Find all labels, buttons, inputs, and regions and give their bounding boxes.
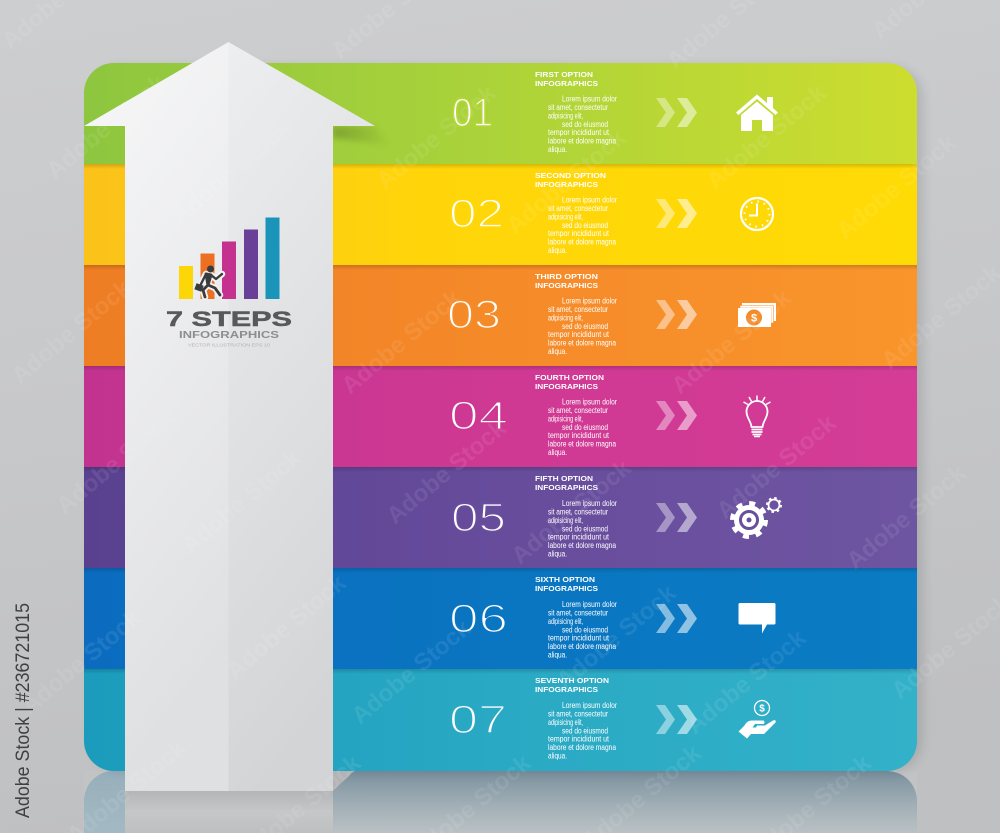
- heading: INFOGRAPHICS: [535, 584, 598, 593]
- watermarks: Adobe Stock: [337, 284, 467, 400]
- icon: running businessman: [195, 266, 222, 297]
- body text: adipisicing elit,: [548, 617, 583, 626]
- band 3: third option: [84, 265, 917, 366]
- body text: sed do eiusmod: [562, 120, 608, 129]
- body text: Lorem ipsum dolor: [562, 499, 617, 508]
- body text: labore et dolore magna: [548, 238, 616, 246]
- body text: sit amet, consectetur: [548, 305, 608, 314]
- watermarks: Adobe Stock: [347, 614, 477, 730]
- watermarks: Adobe Stock: [502, 124, 632, 240]
- stock id label: Adobe Stock | #236721015: [13, 603, 34, 818]
- heading: SIXTH OPTION: [535, 575, 595, 584]
- fold under arrow: [333, 771, 354, 791]
- body text: Lorem ipsum dolor: [562, 398, 617, 406]
- body text: adipisicing elit,: [548, 112, 583, 120]
- chevrons: [656, 98, 697, 127]
- panel shadow: [92, 68, 922, 770]
- body text: labore et dolore magna: [548, 440, 616, 448]
- body text: aliqua.: [548, 650, 567, 660]
- chevrons: [656, 705, 697, 734]
- watermarks: Adobe Stock: [832, 129, 962, 245]
- chevrons: [656, 199, 697, 228]
- watermarks: Adobe Stock: [52, 404, 182, 520]
- number 03: 03: [447, 293, 501, 337]
- icon: hand holding coin: $: [759, 704, 765, 714]
- band 5: fifth option: [84, 467, 917, 568]
- body text: tempor incididunt ut: [548, 431, 610, 440]
- body text: sit amet, consectetur: [548, 103, 608, 112]
- body text: adipisicing elit,: [548, 314, 583, 322]
- floor reflection: [84, 771, 917, 833]
- band 1: first option: [84, 63, 917, 164]
- watermarks: Adobe Stock: [17, 604, 147, 720]
- number 04: 04: [449, 394, 508, 438]
- body text: sed do eiusmod: [562, 524, 608, 534]
- chevrons: [656, 300, 697, 329]
- band 4: fourth option: [84, 366, 917, 467]
- watermarks: Adobe Stock: [382, 414, 512, 530]
- body text: sit amet, consectetur: [548, 710, 608, 718]
- watermarks: Adobe Stock: [702, 79, 832, 195]
- body text: Lorem ipsum dolor: [562, 701, 617, 710]
- body text: [548, 94, 617, 154]
- heading: INFOGRAPHICS: [535, 685, 598, 694]
- heading: SECOND OPTION: [535, 171, 606, 180]
- chevrons: [656, 503, 697, 532]
- body text: labore et dolore magna: [548, 743, 616, 752]
- body text: aliqua.: [548, 347, 567, 356]
- body text: tempor incididunt ut: [548, 634, 610, 642]
- body text: tempor incididunt ut: [548, 734, 610, 744]
- icon: banknotes: [738, 303, 776, 327]
- watermarks: Adobe Stock: [712, 409, 842, 525]
- watermarks: Adobe Stock: [42, 69, 172, 185]
- body text: aliqua.: [548, 448, 567, 457]
- watermarks: Adobe Stock: [682, 624, 812, 740]
- band 6: sixth option: [84, 568, 917, 669]
- body text: Lorem ipsum dolor: [562, 94, 617, 104]
- icon: house: [736, 94, 778, 131]
- watermarks: Adobe Stock: [667, 284, 797, 400]
- body text: aliqua.: [548, 246, 567, 255]
- body text: labore et dolore magna: [548, 541, 616, 550]
- body text: [548, 499, 617, 558]
- title: 7 STEPS: [166, 308, 292, 331]
- body text: [548, 398, 617, 457]
- chevrons: [656, 401, 697, 430]
- body text: tempor incididunt ut: [548, 532, 610, 542]
- band 7: seventh option: [84, 669, 917, 771]
- body text: tempor incididunt ut: [548, 128, 610, 137]
- body text: sed do eiusmod: [562, 626, 608, 634]
- body text: [548, 600, 617, 660]
- watermarks: Adobe Stock: [222, 569, 352, 685]
- heading: [535, 676, 609, 694]
- body text: labore et dolore magna: [548, 338, 616, 348]
- body text: sed do eiusmod: [562, 221, 608, 230]
- icon: banknotes: $: [751, 312, 757, 324]
- icon: light bulb: [744, 396, 770, 436]
- heading: INFOGRAPHICS: [535, 281, 598, 290]
- body text: adipisicing elit,: [548, 212, 583, 222]
- heading: [535, 171, 606, 189]
- body text: sit amet, consectetur: [548, 508, 608, 516]
- bar chart: [179, 218, 280, 299]
- watermarks: Adobe Stock: [167, 114, 297, 230]
- body text: Lorem ipsum dolor: [562, 196, 617, 204]
- body text: adipisicing elit,: [548, 516, 583, 525]
- body text: sit amet, consectetur: [548, 406, 608, 415]
- watermarks: Adobe Stock: [507, 454, 637, 570]
- body text: [548, 296, 617, 356]
- body text: sed do eiusmod: [562, 726, 608, 736]
- watermarks: Adobe Stock: [177, 444, 307, 560]
- body text: labore et dolore magna: [548, 642, 616, 651]
- heading: [535, 373, 604, 391]
- icon: gears: [732, 498, 781, 536]
- chevrons: [656, 604, 697, 633]
- up arrow: [84, 42, 375, 791]
- number 07: 07: [449, 698, 507, 742]
- heading: FIRST OPTION: [535, 70, 593, 79]
- heading: INFOGRAPHICS: [535, 79, 598, 88]
- number 01: 01: [452, 91, 493, 135]
- caption: VECTOR ILLUSTRATION EPS 10: [188, 342, 271, 348]
- body text: aliqua.: [548, 550, 567, 558]
- heading: FOURTH OPTION: [535, 373, 604, 382]
- heading: [535, 474, 598, 492]
- body text: Lorem ipsum dolor: [562, 296, 617, 306]
- watermarks: Adobe Stock: [842, 459, 972, 575]
- icon: clock: [741, 198, 773, 230]
- body text: sit amet, consectetur: [548, 608, 608, 618]
- body text: [548, 701, 617, 760]
- watermarks: Adobe Stock: [7, 274, 137, 390]
- logo block: 7 steps: [166, 218, 292, 348]
- heading: SEVENTH OPTION: [535, 676, 609, 685]
- body text: Lorem ipsum dolor: [562, 600, 617, 609]
- icon: speech bubble: [738, 603, 776, 634]
- subtitle: INFOGRAPHICS: [179, 330, 279, 341]
- body text: adipisicing elit,: [548, 718, 583, 727]
- heading: FIFTH OPTION: [535, 474, 593, 483]
- number 06: 06: [449, 597, 508, 641]
- number 05: 05: [451, 496, 506, 540]
- body text: tempor incididunt ut: [548, 330, 610, 339]
- body text: adipisicing elit,: [548, 414, 583, 424]
- arrow head shadow: [333, 126, 392, 146]
- band 2: second option: [84, 164, 917, 265]
- body text: sed do eiusmod: [562, 322, 608, 331]
- heading: [535, 575, 598, 593]
- body text: sit amet, consectetur: [548, 204, 608, 213]
- watermarks: Adobe Stock: [552, 579, 682, 695]
- heading: THIRD OPTION: [535, 272, 598, 281]
- arrow reflection: [125, 791, 333, 833]
- icon: hand holding coin: [738, 700, 776, 738]
- body text: labore et dolore magna: [548, 136, 616, 146]
- heading: INFOGRAPHICS: [535, 382, 598, 391]
- heading: INFOGRAPHICS: [535, 180, 598, 189]
- heading: [535, 272, 598, 290]
- number 02: 02: [449, 192, 504, 236]
- heading: INFOGRAPHICS: [535, 483, 598, 492]
- body text: sed do eiusmod: [562, 423, 608, 432]
- body text: tempor incididunt ut: [548, 229, 610, 238]
- heading: [535, 70, 598, 88]
- body text: aliqua.: [548, 145, 567, 154]
- body text: aliqua.: [548, 752, 567, 760]
- body text: [548, 196, 617, 255]
- watermarks: Adobe Stock: [372, 79, 502, 195]
